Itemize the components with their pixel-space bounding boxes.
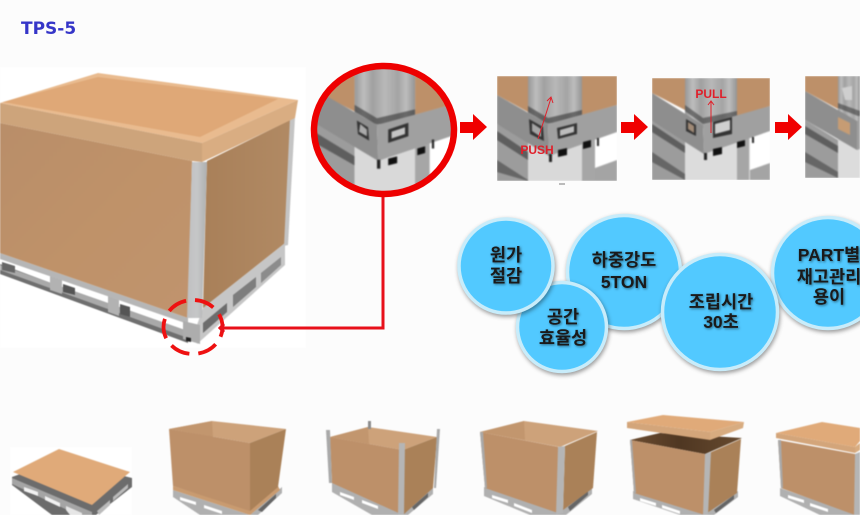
bubble: assembly time: 조립시간 — [689, 292, 753, 312]
bubble: PART: 용이 — [813, 287, 845, 307]
step 2: pull — [652, 78, 770, 180]
bubble: load strength — [568, 216, 680, 328]
bubble: PART: PART별 — [798, 245, 860, 265]
bubble: assembly time: 30초 — [703, 312, 739, 332]
red ring — [314, 66, 454, 194]
bubble: cost saving: 절감 — [490, 266, 522, 286]
bubble: PART: 재고관리 — [797, 267, 860, 287]
red leader line — [220, 196, 383, 332]
bubble: assembly time — [662, 254, 778, 370]
bubble: cost saving: 원가 — [490, 245, 522, 265]
bubble: PART — [772, 218, 860, 328]
pull arrow — [708, 101, 714, 133]
pallet — [0, 243, 285, 344]
bubble: load strength: 5TON — [601, 272, 647, 292]
bubble: space efficiency: 공간 — [547, 307, 579, 327]
step 1: push — [497, 76, 617, 185]
push arrow — [538, 97, 553, 139]
arrow 1 — [460, 114, 487, 140]
box front panel — [0, 123, 192, 318]
step 3: released corner — [805, 76, 860, 178]
title: TPS-5 — [21, 19, 76, 39]
red dashed highlight on pallet corner — [164, 300, 222, 354]
assembly step 6: closed box — [776, 422, 860, 515]
main product image: assembled box on pallet — [0, 67, 306, 348]
assembly step 4: carton with frame — [480, 421, 598, 515]
box side panel — [203, 119, 292, 308]
assembly step 3: carton with posts — [326, 421, 440, 515]
push label: PUSH — [520, 143, 554, 157]
assembly step 2: carton on pallet — [169, 421, 286, 515]
carton inner walls — [169, 421, 286, 443]
bubble: space efficiency — [518, 282, 606, 372]
lid — [0, 73, 298, 162]
arrow 2 — [621, 114, 648, 140]
bubble: load strength: 하중강도 — [592, 250, 656, 270]
bubble: space efficiency: 효율성 — [539, 328, 587, 348]
assembly step 1: pallet with base sheet — [10, 447, 132, 515]
assembly step 5: lid above carton — [627, 415, 744, 515]
arrow 3 — [775, 114, 802, 140]
front post — [187, 162, 207, 318]
pull label: PULL — [695, 87, 727, 101]
rear post — [284, 117, 295, 246]
small caption mark — [559, 183, 565, 185]
bubble: cost saving — [459, 219, 553, 313]
zoom circle: corner detail — [310, 62, 458, 198]
